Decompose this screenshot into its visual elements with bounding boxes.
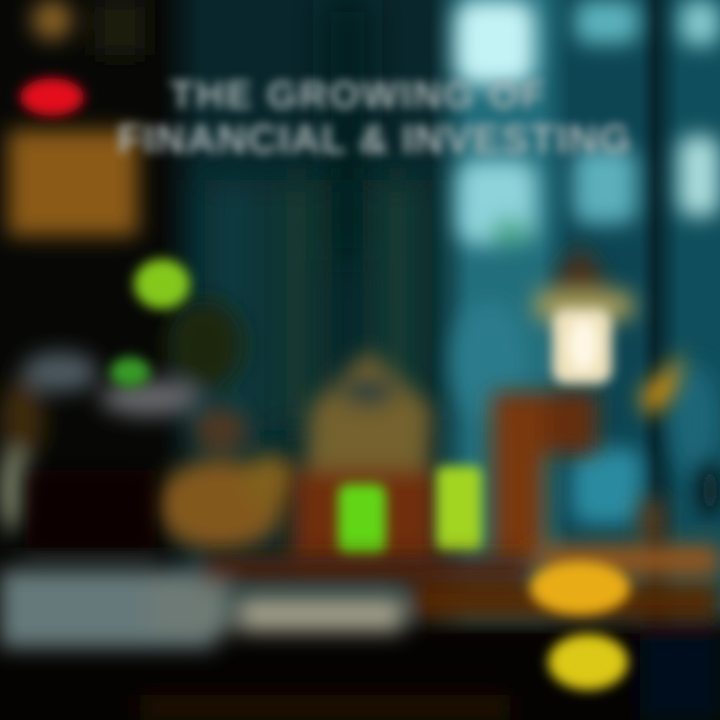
background: forest through the window <box>205 0 420 450</box>
table and book <box>0 462 720 720</box>
house and bars <box>292 350 597 565</box>
shelf: lantern, box and clutter <box>0 0 296 550</box>
red and green accents <box>20 78 190 387</box>
window light patches <box>452 0 720 524</box>
green blocks <box>338 466 482 556</box>
yellow reflections <box>530 561 630 690</box>
title line 1: THE GROWING OF <box>170 74 547 117</box>
title line 2: FINANCIAL & INVESTING <box>117 116 632 162</box>
lamp <box>535 245 685 542</box>
title: text is illegible in the reference, approximated <box>112 74 635 162</box>
lamp glow <box>552 308 612 384</box>
